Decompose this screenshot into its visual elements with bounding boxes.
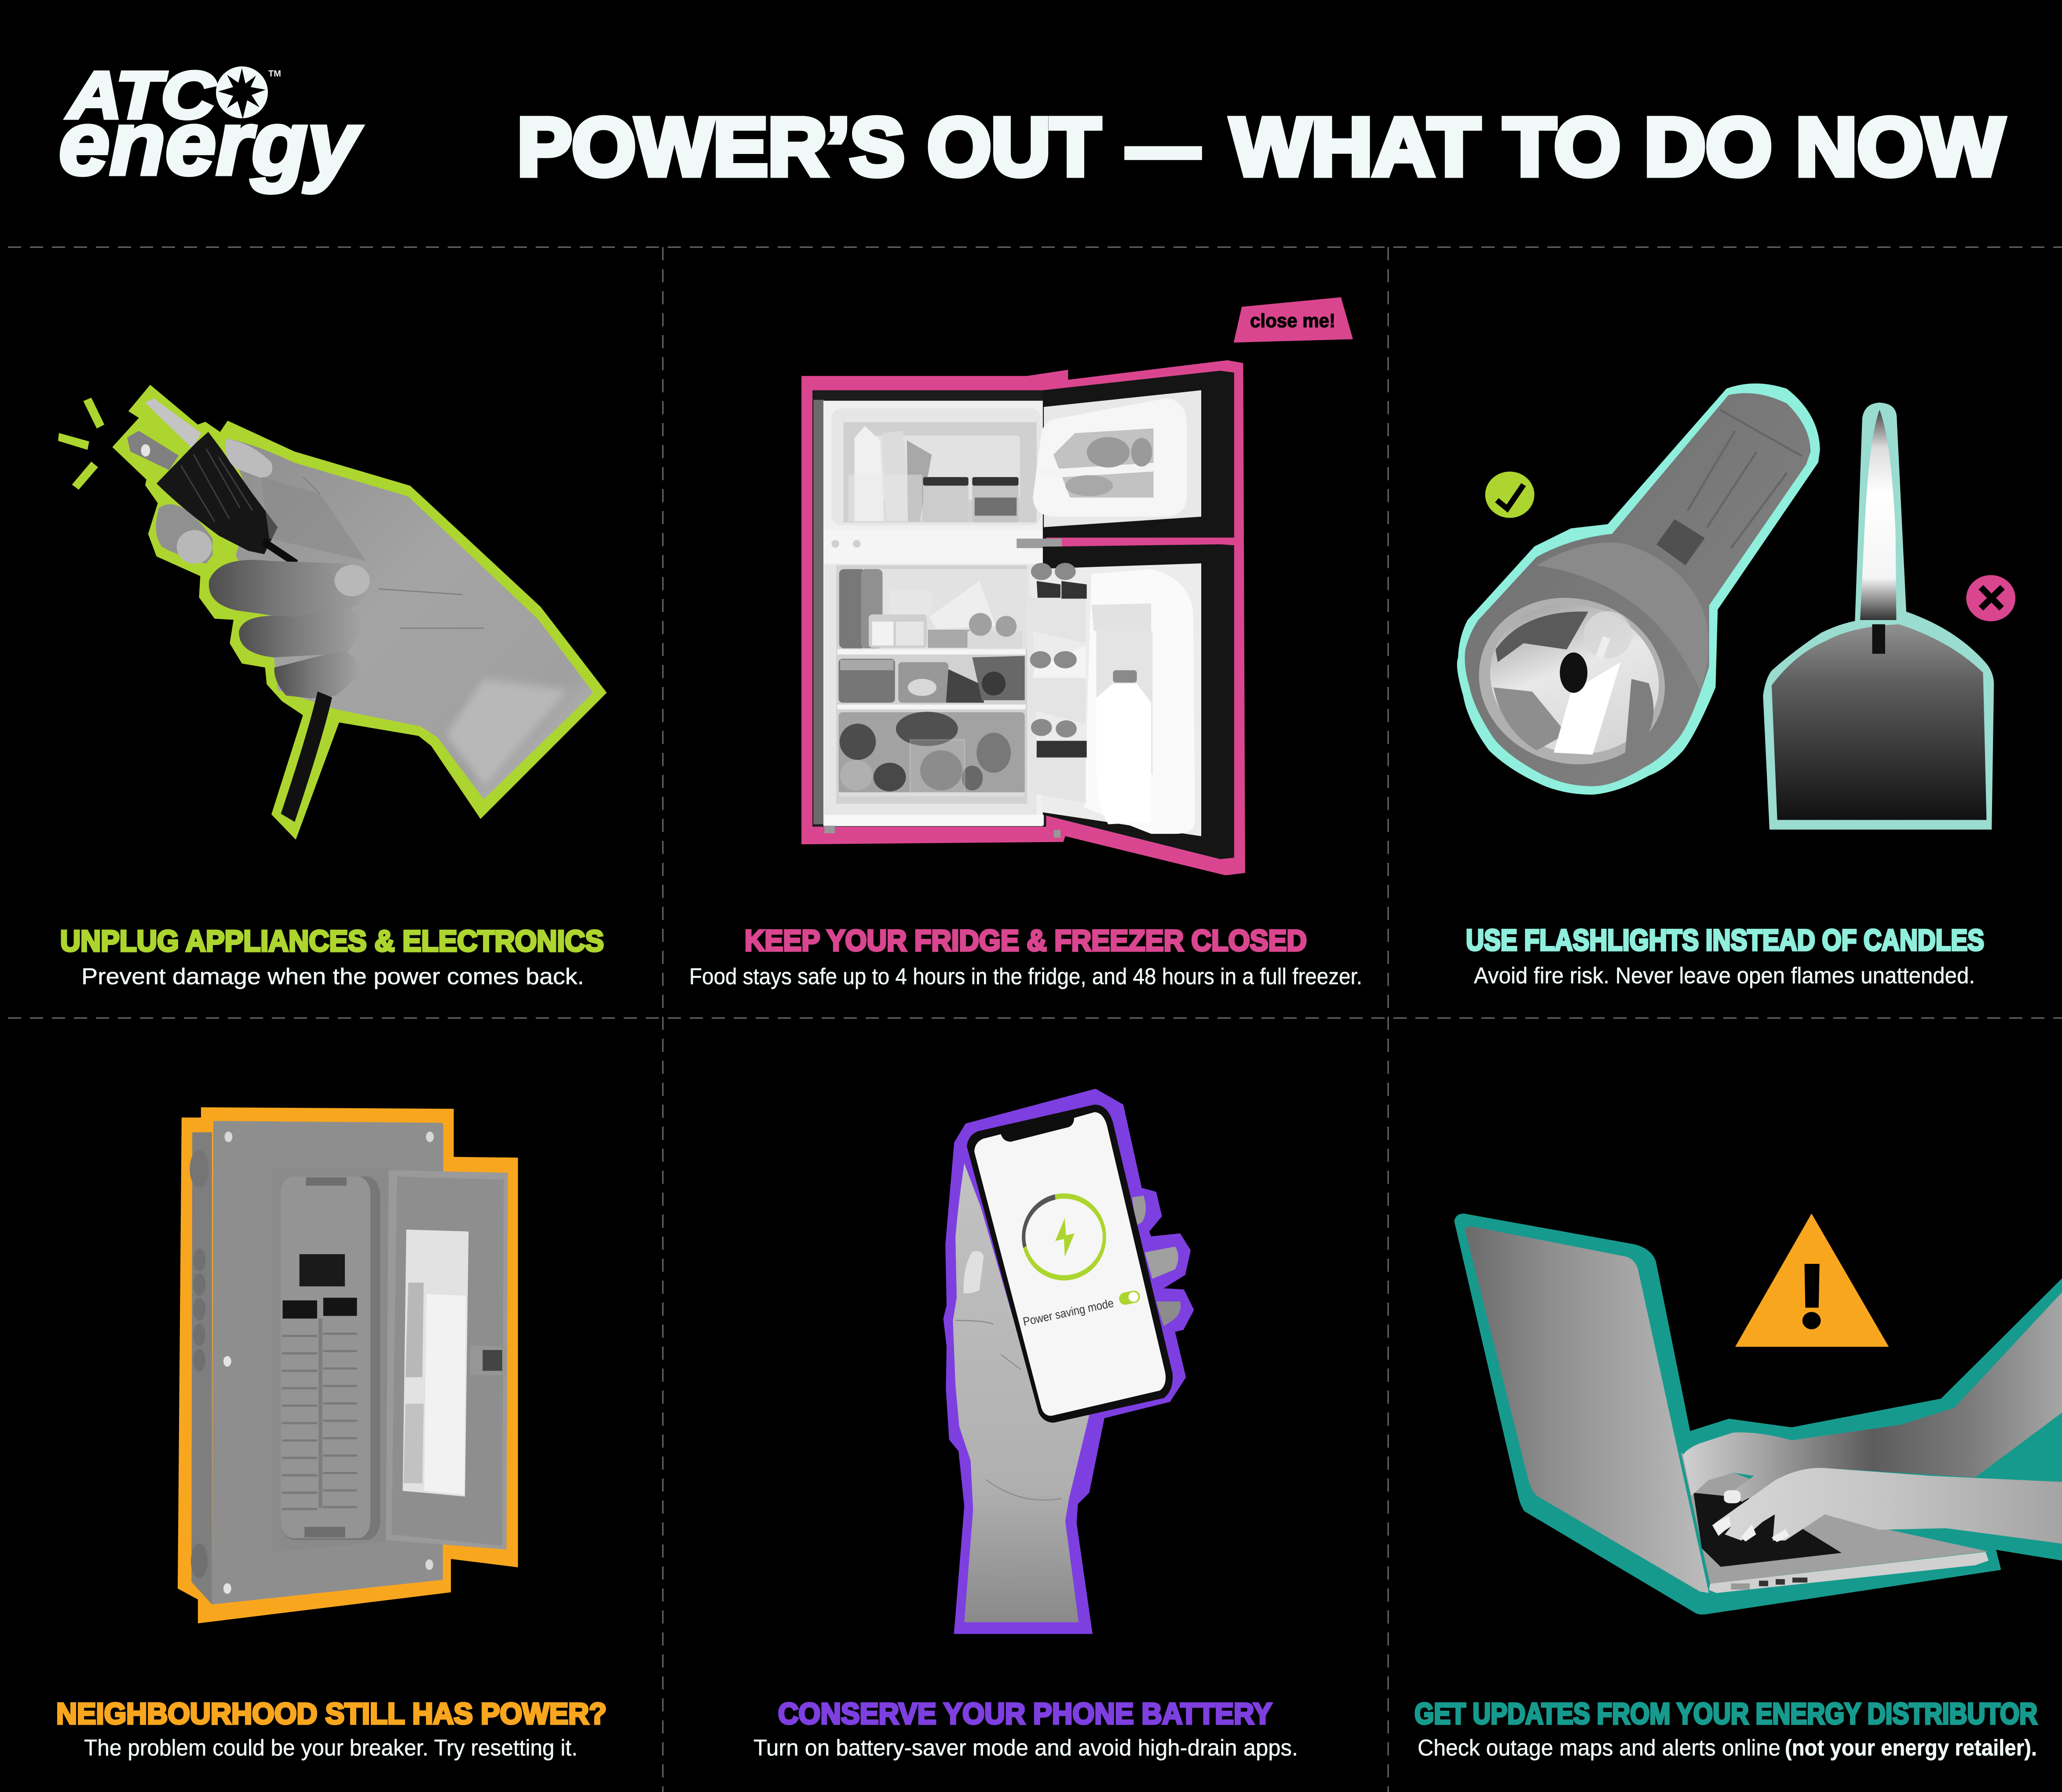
heading: KEEP YOUR FRIDGE & FREEZER CLOSED: [745, 924, 1307, 957]
panel: unplug appliances: [58, 385, 607, 989]
close me tag: [1234, 297, 1353, 343]
fridge top door: [1033, 371, 1234, 538]
illustration: hand holding phone: [943, 1089, 1194, 1634]
hand: [953, 1163, 1181, 1622]
bolt icon: [1055, 1218, 1075, 1257]
illustration: open fridge: [801, 297, 1353, 875]
cord: [288, 694, 325, 818]
logo: ATCO energy: TM: [268, 69, 281, 79]
illustration: laptop with hands: [1454, 1214, 2062, 1615]
phone outline: [943, 1089, 1194, 1634]
laptop lid: [1465, 1226, 1709, 1593]
description: [1418, 1735, 2037, 1761]
title: WHAT TO DO NOW: [1231, 102, 2004, 193]
panel: phone: [753, 1089, 1298, 1761]
fridge bottom door: [1030, 544, 1234, 859]
description: Avoid fire risk. Never leave open flames unattended.: [1474, 963, 1975, 989]
flashlight: [1455, 383, 1820, 795]
laptop outline: [1454, 1214, 2062, 1615]
hand outline: [112, 385, 607, 839]
heading: NEIGHBOURHOOD STILL HAS POWER?: [56, 1697, 607, 1730]
title: POWER’S OUT: [517, 102, 1100, 193]
description: Check outage maps and alerts online: [1418, 1735, 1780, 1761]
header: [59, 58, 2004, 193]
title: —: [1127, 102, 1199, 193]
hand: [156, 438, 593, 799]
laptop base: [1681, 1453, 1989, 1593]
illustration: hand holding plug: [58, 385, 607, 839]
warning triangle: [1735, 1214, 1889, 1347]
description: Turn on battery-saver mode and avoid high-drain apps.: [753, 1735, 1298, 1761]
title: [517, 102, 2004, 193]
panel: flashlights: [1455, 383, 2015, 989]
front arm: [1712, 1468, 2062, 1544]
tag text: close me!: [1250, 310, 1335, 332]
check icon: [1485, 471, 1534, 518]
illustration: flashlight and candle: [1455, 383, 2015, 829]
logo: ATCO energy: energy: [59, 93, 362, 193]
breaker box: [190, 1121, 443, 1604]
back arm: [1683, 1292, 2062, 1502]
description: (not your energy retailer).: [1785, 1735, 2037, 1761]
fridge outline: [801, 360, 1245, 875]
plug: [157, 432, 296, 564]
phone: [967, 1105, 1173, 1423]
fridge cabinet: [812, 390, 1062, 833]
breaker outline: [178, 1107, 518, 1624]
logo: ATCO energy: ATC: [66, 58, 216, 132]
heading: CONSERVE YOUR PHONE BATTERY: [778, 1697, 1272, 1730]
description: The problem could be your breaker. Try resetting it.: [84, 1735, 578, 1761]
candle: [1763, 402, 1994, 829]
illustration: breaker panel: [178, 1107, 518, 1624]
fingers: [209, 438, 568, 785]
battery ring: [1024, 1196, 1104, 1278]
panel: fridge: [689, 297, 1362, 989]
description: Prevent damage when the power comes back.: [81, 964, 584, 989]
heading: UNPLUG APPLIANCES & ELECTRONICS: [60, 924, 604, 958]
panel: updates: [1415, 1214, 2062, 1761]
description: Food stays safe up to 4 hours in the fridge, and 48 hours in a full freezer.: [689, 964, 1362, 989]
panel: breaker: [56, 1107, 607, 1761]
breaker door: [386, 1170, 508, 1550]
prongs: [127, 398, 201, 470]
power saving label: Power saving mode: [1022, 1296, 1115, 1328]
sparks: [58, 398, 104, 490]
cross icon: [1966, 575, 2015, 621]
toggle: [1118, 1289, 1141, 1306]
